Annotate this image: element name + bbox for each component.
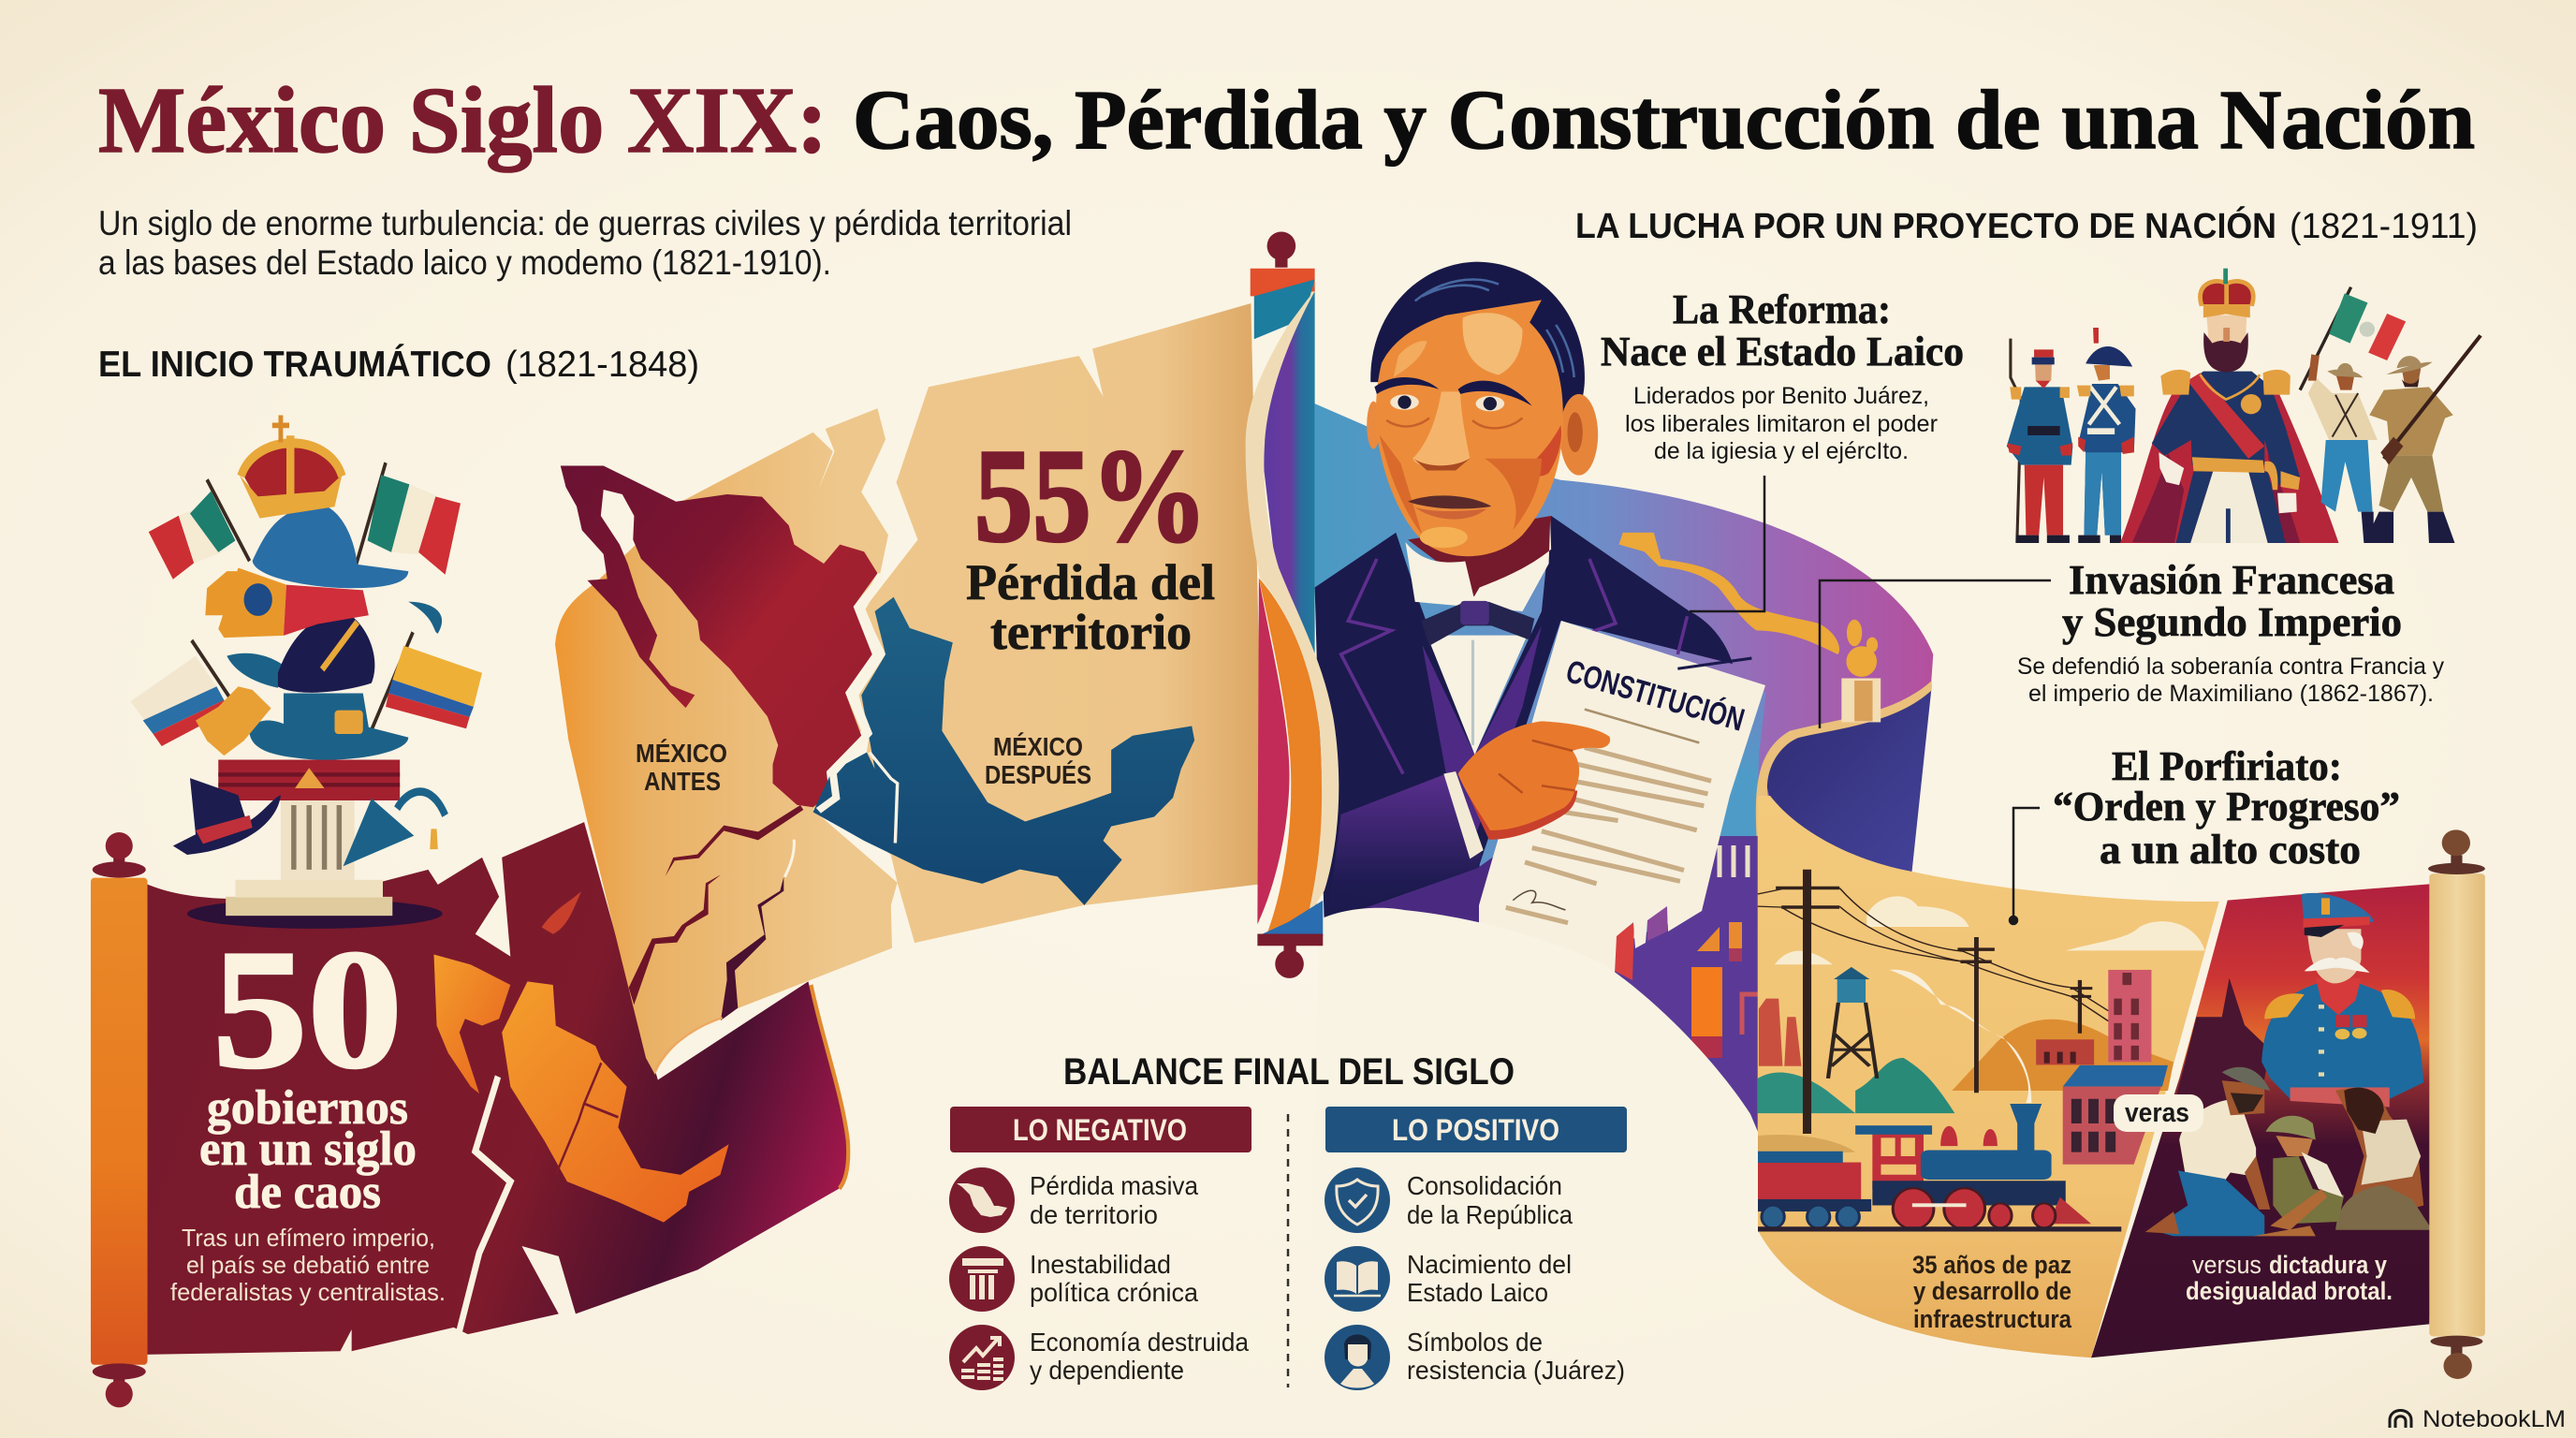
text block: La Reforma: Nace el Estado Laico <box>1601 329 1964 374</box>
smoke plume <box>1890 970 2031 1103</box>
hand <box>1458 774 1577 840</box>
header: lo negativo <box>950 1107 1251 1152</box>
label: México antes: ANTES <box>644 767 721 796</box>
cream space below the portrait <box>1310 908 1758 1259</box>
panel: middle parchment with maps <box>555 303 1265 1075</box>
text block: El Porfiriato <box>2053 743 2400 873</box>
buildings <box>2036 970 2168 1165</box>
text: intro <box>98 204 1072 282</box>
text: versus dictadura: desigualdad brotal. <box>2186 1277 2393 1305</box>
heading: El inicio traumático: EL INICIO TRAUMÁTICO <box>98 344 491 385</box>
text block: La Reforma: Liderados por Benito Juárez, <box>1633 383 1929 409</box>
hills and factory <box>1758 999 2174 1113</box>
crack in banner <box>460 1077 510 1331</box>
icon: emperor Maximiliano with soldiers <box>2007 269 2481 543</box>
panel: Benito Juárez portrait <box>1315 262 1733 927</box>
water tower <box>1828 967 1877 1078</box>
center scroll rod <box>1246 231 1339 978</box>
shirt <box>1427 636 1528 755</box>
right scroll rod <box>2428 829 2485 1379</box>
text block: La Reforma: de la igiesia y el ejércIto. <box>1654 438 1909 464</box>
steam locomotive <box>1758 1104 2121 1232</box>
general Díaz <box>2261 893 2423 1107</box>
callout: 50 gobiernos: federalistas y centralistas. <box>170 1278 446 1306</box>
soldier: bicorn guard <box>2077 328 2136 543</box>
hair <box>1370 262 1585 428</box>
face highlight <box>1463 313 1523 375</box>
callout: 50 gobiernos: gobiernos <box>207 1081 408 1135</box>
item: nacimiento: Estado Laico <box>1407 1278 1548 1307</box>
workers <box>2145 1067 2432 1236</box>
parchment right fragment <box>837 303 1265 943</box>
item: nacimiento <box>1325 1246 1572 1312</box>
panel: Porfiriato progress scene <box>1758 796 2219 1357</box>
callout: 50 gobiernos: Tras un efímero imperio, <box>182 1224 435 1252</box>
ember accent <box>542 891 581 934</box>
white cracks <box>818 574 898 844</box>
callout: 50 gobiernos <box>170 916 446 1306</box>
item: inestabilidad: política crónica <box>1030 1278 1198 1307</box>
item: inestabilidad <box>949 1246 1198 1312</box>
text block: La Reforma <box>1601 286 1964 464</box>
callout: 55% pérdida del territorio: territorio <box>990 604 1192 660</box>
callout: 55% pérdida del territorio: 55% <box>974 421 1208 569</box>
dark cracks across parchment <box>629 805 803 1070</box>
crown <box>240 415 342 519</box>
text block: El Porfiriato: El Porfiriato: <box>2112 743 2342 789</box>
label: México después <box>985 732 1091 789</box>
title: México Siglo XIX: <box>98 67 827 172</box>
soldier: peasant with flag <box>2308 354 2378 543</box>
sand mound <box>1758 1135 1855 1156</box>
item: economía: Economía destruida <box>1030 1328 1249 1357</box>
text block: Invasión Francesa: Se defendió la soberanía contra Francia y <box>2017 653 2444 680</box>
header: lo positivo <box>1325 1107 1627 1152</box>
text block: Invasión Francesa: y Segundo Imperio <box>2062 599 2402 645</box>
rod upper band <box>1260 286 1315 654</box>
text block: La Reforma: los liberales limitaron el poder <box>1625 411 1938 437</box>
soldier: French infantry <box>2007 339 2072 543</box>
suit <box>1315 516 1733 927</box>
waistcoat <box>1422 625 1542 831</box>
label: México después: DESPUÉS <box>985 760 1091 789</box>
ribbon with gold <box>1619 533 1839 654</box>
map fracture lines <box>556 1063 618 1175</box>
shirt cuff <box>1443 771 1484 858</box>
monument with cactus <box>1841 620 1881 722</box>
blue hat base <box>250 694 408 760</box>
blue lower ribbon <box>1694 673 1766 838</box>
panel: dictatorship scene <box>2091 884 2437 1357</box>
header: lo negativo: LO NEGATIVO <box>1013 1113 1187 1147</box>
icon: pile of hats, crowns and flags on a pedestal <box>130 415 482 929</box>
rod orange stripe <box>1259 578 1323 933</box>
bow tie <box>1421 602 1534 646</box>
divider <box>1287 1114 1289 1387</box>
text: versus dictadura: versus <box>2192 1251 2261 1279</box>
item: consolidación: de la República <box>1407 1200 1573 1229</box>
text block: Invasión Francesa <box>2017 557 2444 707</box>
left rod <box>91 832 148 1407</box>
text: versus dictadura: dictadura y <box>2269 1251 2387 1279</box>
label: México antes <box>636 739 727 796</box>
flag: tricolor lower right <box>370 632 482 734</box>
item: pérdida masiva <box>949 1167 1198 1233</box>
navy curl <box>1764 685 1932 873</box>
leader lines <box>1690 476 2051 924</box>
callout: 50 gobiernos: 50 <box>212 916 402 1104</box>
item: pérdida masiva: Pérdida masiva <box>1030 1171 1198 1200</box>
flag: Mexico left <box>149 479 250 580</box>
Constitución title on document: CONSTITUCIÓN <box>1562 653 1749 739</box>
pen <box>1677 658 1751 668</box>
clouds <box>1775 896 2204 964</box>
item: inestabilidad: Inestabilidad <box>1030 1250 1171 1279</box>
tan lip <box>1756 681 1932 837</box>
item: economía: y dependiente <box>1030 1356 1184 1385</box>
text: 35 años de paz: y desarrollo de <box>1913 1277 2071 1305</box>
tan parchment <box>1758 796 2219 1357</box>
gold buckle <box>334 711 363 734</box>
hand highlight <box>1458 721 1610 830</box>
heading: La lucha por un proyecto de nación: LA LUCHA POR UN PROYECTO DE NACIÓN <box>1575 205 2276 246</box>
panel: Balance final del siglo <box>949 1051 1627 1390</box>
rod top cap <box>1251 231 1315 339</box>
item: símbolos: Símbolos de <box>1407 1328 1543 1357</box>
callout: 50 gobiernos: el país se debatió entre <box>186 1251 430 1279</box>
blue umbrella <box>344 792 446 866</box>
text: 35 años de paz: 35 años de paz <box>1912 1251 2071 1279</box>
Constitución document <box>1479 621 1765 974</box>
panel: Juárez band and curl <box>1315 404 1933 936</box>
navy fallen hat <box>173 778 281 855</box>
title: Caos, Pérdida y Construcción de una Nación <box>853 74 2475 167</box>
text: intro: Un siglo de enorme turbulencia: de guerras civiles y pérdida territorial <box>98 204 1072 242</box>
text block: El Porfiriato: “Orden y Progreso” <box>2053 784 2400 829</box>
heading: El inicio traumático <box>98 344 699 385</box>
finger lines <box>1499 741 1575 793</box>
red panel background <box>2091 884 2437 1357</box>
callout: 50 gobiernos: de caos <box>234 1166 381 1219</box>
panel: purple city strip <box>1601 836 1758 1137</box>
torn banner <box>145 822 848 1355</box>
header: lo positivo: LO POSITIVO <box>1392 1113 1559 1147</box>
silhouette <box>2174 978 2270 1107</box>
face details <box>1374 341 1561 548</box>
parchment left fragment <box>555 408 898 1075</box>
text block: La Reforma: La Reforma: <box>1673 286 1891 332</box>
lapels <box>1341 559 1688 774</box>
map: México después <box>813 597 1194 905</box>
flag: Mexico right <box>357 462 461 575</box>
navy bicorn <box>227 612 374 693</box>
flag: tricolor lower left <box>130 640 238 746</box>
gradient ribbon <box>1315 404 1933 936</box>
label: México antes: MÉXICO <box>636 739 727 768</box>
emperor <box>2120 269 2339 543</box>
title <box>98 67 2475 172</box>
flag: Mexico raised <box>2300 287 2406 390</box>
small gold crown upper <box>205 571 238 615</box>
item: símbolos <box>1325 1325 1625 1390</box>
lower purple coat <box>1337 836 1523 927</box>
item: consolidación <box>1325 1167 1573 1233</box>
logo: NotebookLM: NotebookLM <box>2422 1406 2566 1432</box>
item: pérdida masiva: de territorio <box>1030 1200 1158 1229</box>
text block: El Porfiriato: a un alto costo <box>2100 827 2361 873</box>
rod bottom cap <box>1257 901 1323 978</box>
blue swoosh <box>408 602 442 634</box>
small gold crown <box>196 686 271 756</box>
badge: versus pill <box>2114 1094 2203 1132</box>
collar <box>1406 520 1551 611</box>
rod lower band <box>1257 578 1290 924</box>
map: México antes <box>561 465 877 807</box>
badge: versus pill: veras <box>2125 1098 2189 1128</box>
document lines <box>1506 710 1711 923</box>
callout: 55% pérdida del territorio <box>966 421 1215 660</box>
gold and red hat <box>218 567 369 638</box>
purple sleeve <box>1327 774 1482 917</box>
label: México después: MÉXICO <box>993 732 1083 761</box>
callout: 55% pérdida del territorio: Pérdida del <box>966 554 1215 610</box>
text: 35 años de paz: infraestructura <box>1913 1305 2072 1333</box>
panel: left red scroll <box>91 822 848 1407</box>
face <box>1376 300 1563 556</box>
text: intro: a las bases del Estado laico y modemo (1821-1910). <box>98 243 831 282</box>
pedestal <box>187 760 443 929</box>
cream scroll edge <box>1246 287 1339 917</box>
orange map of Mexico <box>434 954 729 1223</box>
soldier: khaki rifleman <box>2364 335 2481 543</box>
item: nacimiento: Nacimiento del <box>1407 1250 1572 1279</box>
heading: El inicio traumático: (1821-1848) <box>505 345 699 385</box>
orange curl edge <box>811 985 848 1188</box>
ears <box>1367 394 1598 476</box>
neck shadow <box>1408 516 1551 597</box>
item: consolidación: Consolidación <box>1407 1171 1562 1200</box>
telegraph poles <box>1758 870 2108 1134</box>
blue top hat <box>253 504 408 588</box>
text block: Invasión Francesa: Invasión Francesa <box>2069 557 2394 603</box>
item: economía <box>949 1325 1249 1390</box>
item: símbolos: resistencia (Juárez) <box>1407 1356 1625 1385</box>
heading: La lucha por un proyecto de nación: (1821-1911) <box>2290 207 2478 246</box>
callout: 50 gobiernos: en un siglo <box>199 1123 417 1176</box>
text block: Invasión Francesa: el imperio de Maximiliano (1862-1867). <box>2028 681 2434 707</box>
text: 35 años de paz <box>1912 1251 2072 1333</box>
text: versus dictadura <box>2186 1251 2393 1305</box>
pen and hand <box>1443 658 1751 858</box>
heading: BALANCE FINAL DEL SIGLO <box>1063 1051 1515 1093</box>
